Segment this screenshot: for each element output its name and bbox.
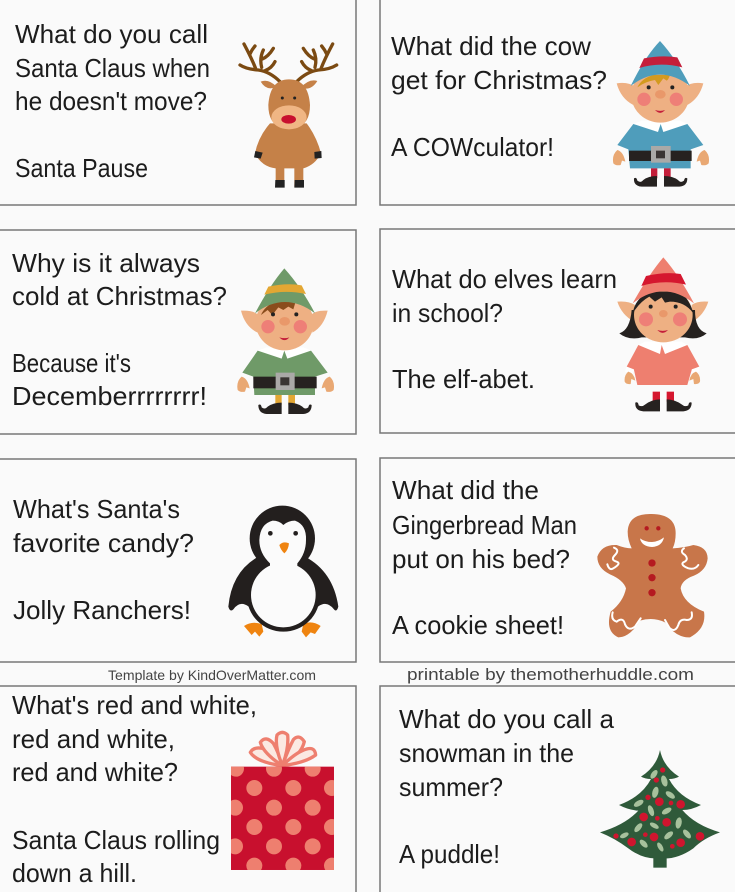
joke text: Decemberrrr: Why is it always bbox=[12, 248, 200, 278]
joke text: Santa Pause bbox=[15, 19, 210, 183]
joke text: Santa Pause: Santa Claus when bbox=[15, 53, 210, 83]
icon: penguin bbox=[228, 506, 338, 637]
icon: polka dot gift bbox=[231, 730, 334, 870]
joke text: A COWculator: A COWculator! bbox=[391, 132, 554, 162]
joke text: Decemberrrr: Decemberrrrrrrr! bbox=[12, 381, 207, 411]
joke text: The elf-abet bbox=[392, 264, 617, 394]
joke text: Santa Claus rolling: red and white, bbox=[12, 724, 175, 754]
icon: blue elf bbox=[613, 41, 709, 187]
joke text: Santa Claus rolling: down a hill. bbox=[12, 858, 137, 888]
joke text: Santa Claus rolling: Santa Claus rolling bbox=[12, 825, 220, 855]
joke text: The elf-abet: The elf-abet. bbox=[392, 364, 535, 394]
card: blue elf joke bbox=[380, 0, 735, 205]
joke text: A cookie sheet bbox=[392, 475, 577, 640]
joke text: A COWculator: get for Christmas? bbox=[391, 65, 607, 95]
card: gift joke bbox=[0, 686, 356, 892]
card: green elf joke bbox=[0, 230, 356, 434]
icon: gingerbread man bbox=[597, 514, 708, 637]
joke text: A COWculator: What did the cow bbox=[391, 31, 591, 61]
joke text: A cookie sheet: Gingerbread Man bbox=[392, 510, 577, 540]
icon: green elf bbox=[237, 268, 334, 414]
joke text: Jolly Ranchers bbox=[13, 494, 194, 625]
card: penguin joke bbox=[0, 459, 356, 662]
joke text: Santa Pause: he doesn't move? bbox=[15, 86, 207, 116]
credit: printable: printable by themotherhuddle.com bbox=[407, 665, 694, 684]
joke text: The elf-abet: in school? bbox=[392, 298, 503, 328]
joke text: A puddle bbox=[399, 704, 615, 869]
joke text: Santa Claus rolling bbox=[12, 690, 257, 888]
joke text: A cookie sheet: A cookie sheet! bbox=[392, 610, 564, 640]
joke text: Jolly Ranchers: Jolly Ranchers! bbox=[13, 595, 191, 625]
card: gingerbread joke bbox=[380, 458, 735, 662]
card: Christmas tree joke bbox=[380, 686, 735, 892]
card: pink elf joke bbox=[380, 229, 735, 433]
card: reindeer joke bbox=[0, 0, 356, 205]
icon: Christmas tree bbox=[600, 750, 720, 868]
joke text: Decemberrrr: cold at Christmas? bbox=[12, 281, 227, 311]
joke text: Santa Pause: What do you call bbox=[15, 19, 208, 49]
joke text: Jolly Ranchers: What's Santa's bbox=[13, 494, 180, 524]
joke text: Jolly Ranchers: favorite candy? bbox=[13, 528, 194, 558]
joke text: A COWculator bbox=[391, 31, 607, 162]
joke text: The elf-abet: What do elves learn bbox=[392, 264, 617, 294]
joke text: Santa Claus rolling: What's red and white, bbox=[12, 690, 257, 720]
joke text: A puddle: summer? bbox=[399, 772, 503, 802]
joke text: Decemberrrr: Because it's bbox=[12, 348, 131, 378]
joke text: A cookie sheet: What did the bbox=[392, 475, 539, 505]
credit: template: Template by KindOverMatter.com bbox=[108, 667, 316, 683]
joke text: A puddle: What do you call a bbox=[399, 704, 615, 734]
joke text: A cookie sheet: put on his bed? bbox=[392, 544, 570, 574]
joke text: A puddle: A puddle! bbox=[399, 839, 500, 869]
icon: pink elf bbox=[617, 257, 708, 411]
joke text: A puddle: snowman in the bbox=[399, 738, 574, 768]
joke text: Santa Claus rolling: red and white? bbox=[12, 757, 178, 787]
icon: reindeer bbox=[240, 44, 337, 188]
joke text: Santa Pause: Santa Pause bbox=[15, 153, 148, 183]
joke text: Decemberrrr bbox=[12, 248, 227, 411]
